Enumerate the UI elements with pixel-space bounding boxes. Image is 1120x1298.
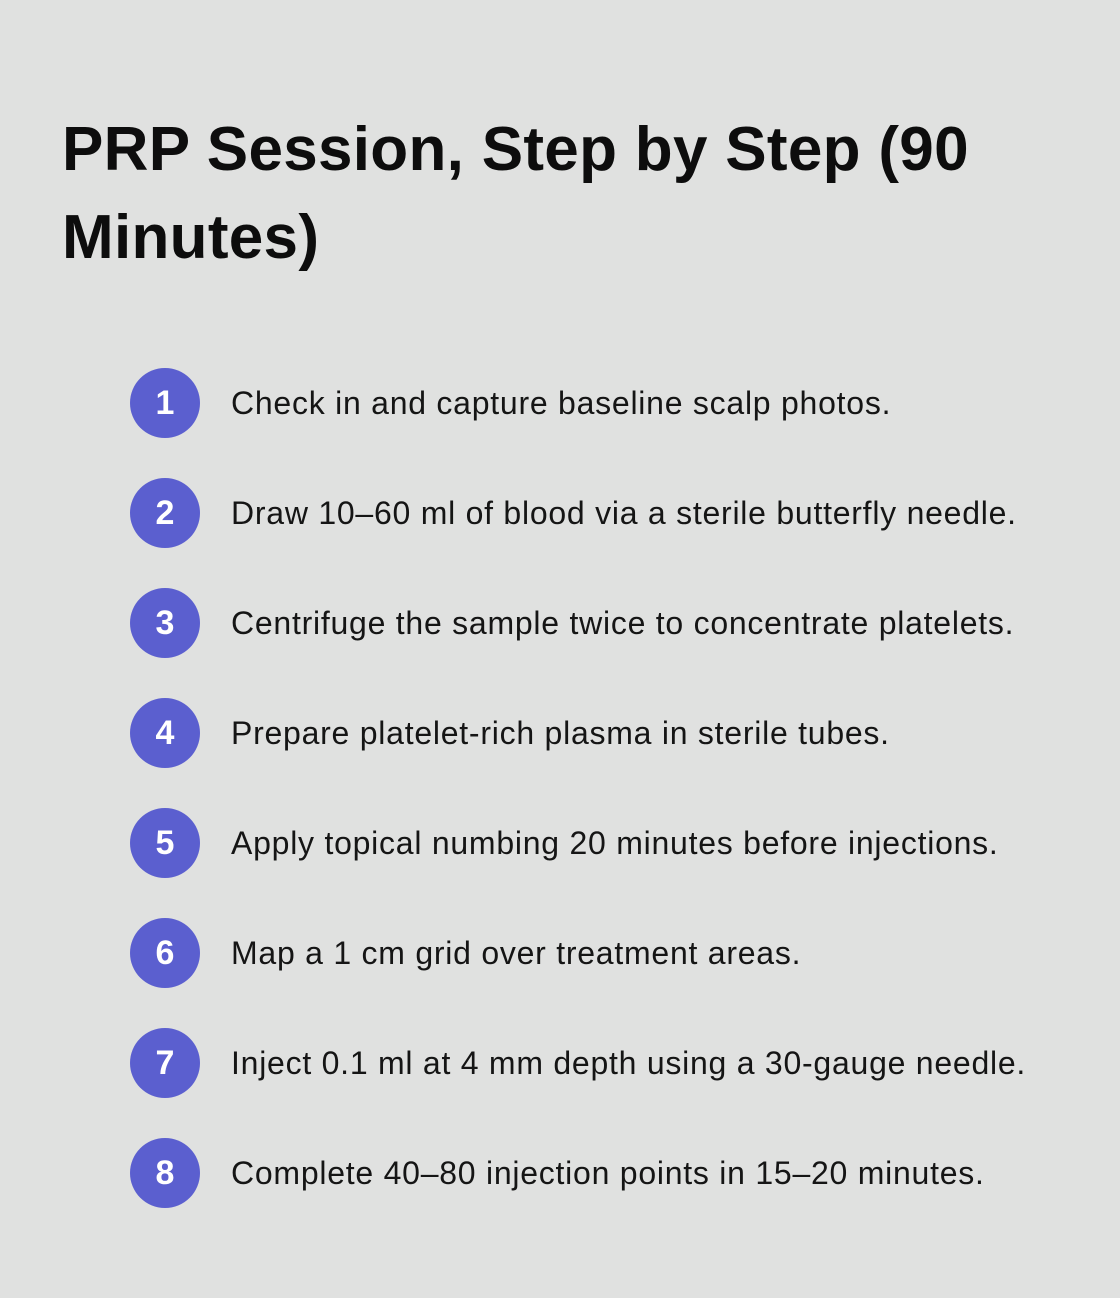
step 8: 8 bbox=[156, 1154, 174, 1192]
steps list bbox=[130, 368, 1026, 1208]
step 2 bbox=[130, 478, 1017, 548]
step 1: 1 bbox=[156, 384, 174, 422]
step 8 bbox=[130, 1138, 985, 1208]
step 7 bbox=[130, 1028, 1026, 1098]
step 1 bbox=[130, 368, 891, 438]
step 4: Prepare platelet-rich plasma in sterile tubes. bbox=[231, 715, 890, 751]
step 4: 4 bbox=[156, 714, 174, 752]
step 5 bbox=[130, 808, 999, 878]
step 2: Draw 10–60 ml of blood via a sterile butterfly needle. bbox=[231, 495, 1017, 531]
step 2: 2 bbox=[156, 494, 174, 532]
step 4 bbox=[130, 698, 890, 768]
step 7: 7 bbox=[156, 1044, 174, 1082]
step 3 bbox=[130, 588, 1014, 658]
step 3: Centrifuge the sample twice to concentrate platelets. bbox=[231, 605, 1014, 641]
step 5: 5 bbox=[156, 824, 174, 862]
step 3: 3 bbox=[156, 604, 174, 642]
step 6: Map a 1 cm grid over treatment areas. bbox=[231, 935, 801, 971]
step 8: Complete 40–80 injection points in 15–20 minutes. bbox=[231, 1155, 985, 1191]
step 5: Apply topical numbing 20 minutes before injections. bbox=[231, 825, 999, 861]
step 6 bbox=[130, 918, 801, 988]
step 7: Inject 0.1 ml at 4 mm depth using a 30-gauge needle. bbox=[231, 1045, 1026, 1081]
title: PRP Session, Step by Step (90 Minutes) bbox=[62, 115, 969, 272]
step 1: Check in and capture baseline scalp photos. bbox=[231, 385, 891, 421]
step 6: 6 bbox=[156, 934, 174, 972]
